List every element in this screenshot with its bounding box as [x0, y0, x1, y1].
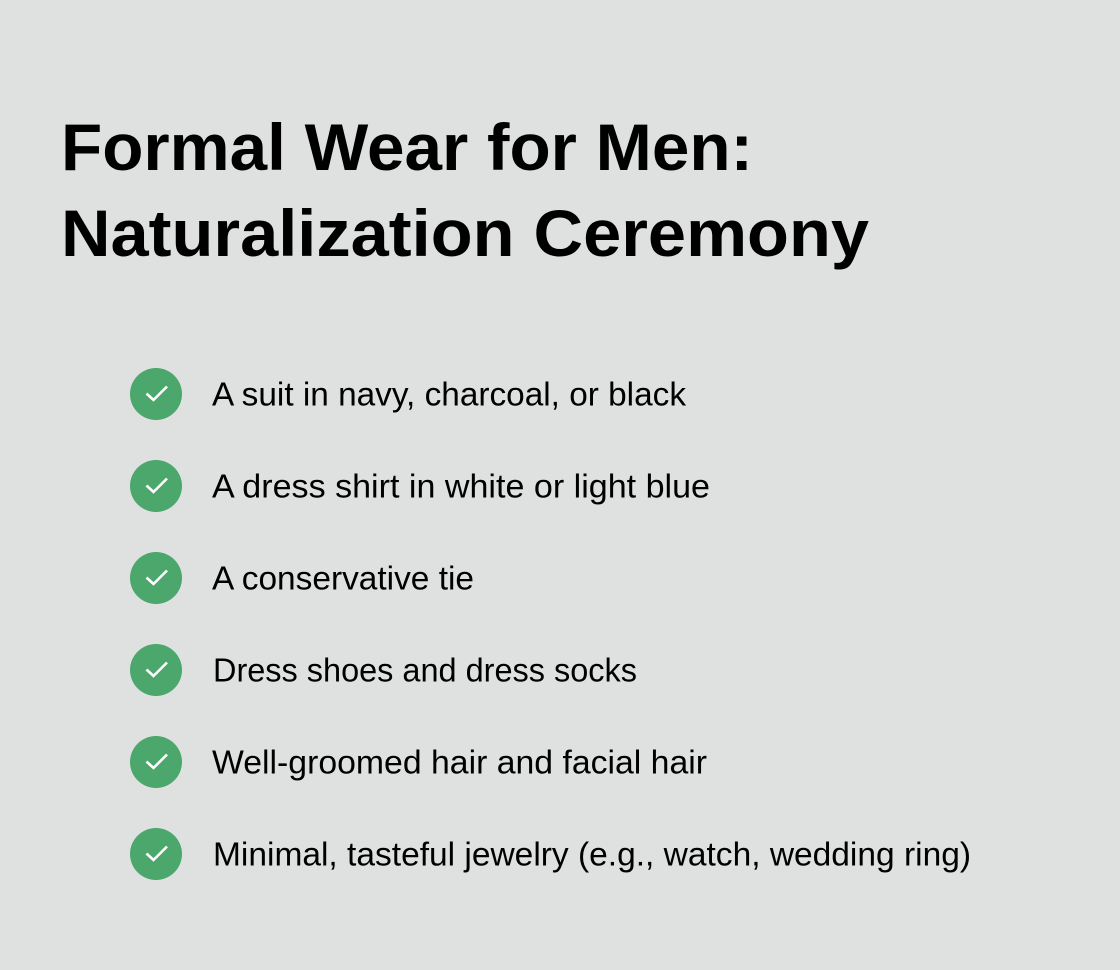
item: grooming: Well-groomed hair and facial hair: [212, 744, 707, 780]
item: suit: A suit in navy, charcoal, or black: [212, 376, 686, 412]
item: grooming: [130, 736, 707, 788]
item: shoes: Dress shoes and dress socks: [213, 652, 637, 688]
item: tie: [130, 552, 474, 604]
item: shirt: [130, 460, 710, 512]
item: shirt: A dress shirt in white or light blue: [212, 468, 710, 504]
item: tie: A conservative tie: [212, 560, 474, 596]
item: jewelry: [130, 828, 971, 880]
title: Naturalization Ceremony: [61, 196, 869, 270]
title: [61, 110, 869, 270]
item: jewelry: Minimal, tasteful jewelry (e.g., watch, wedding ring): [213, 836, 971, 872]
item: shoes: [130, 644, 637, 696]
title: Formal Wear for Men:: [61, 110, 753, 184]
checklist: [130, 368, 971, 880]
item: suit: [130, 368, 686, 420]
